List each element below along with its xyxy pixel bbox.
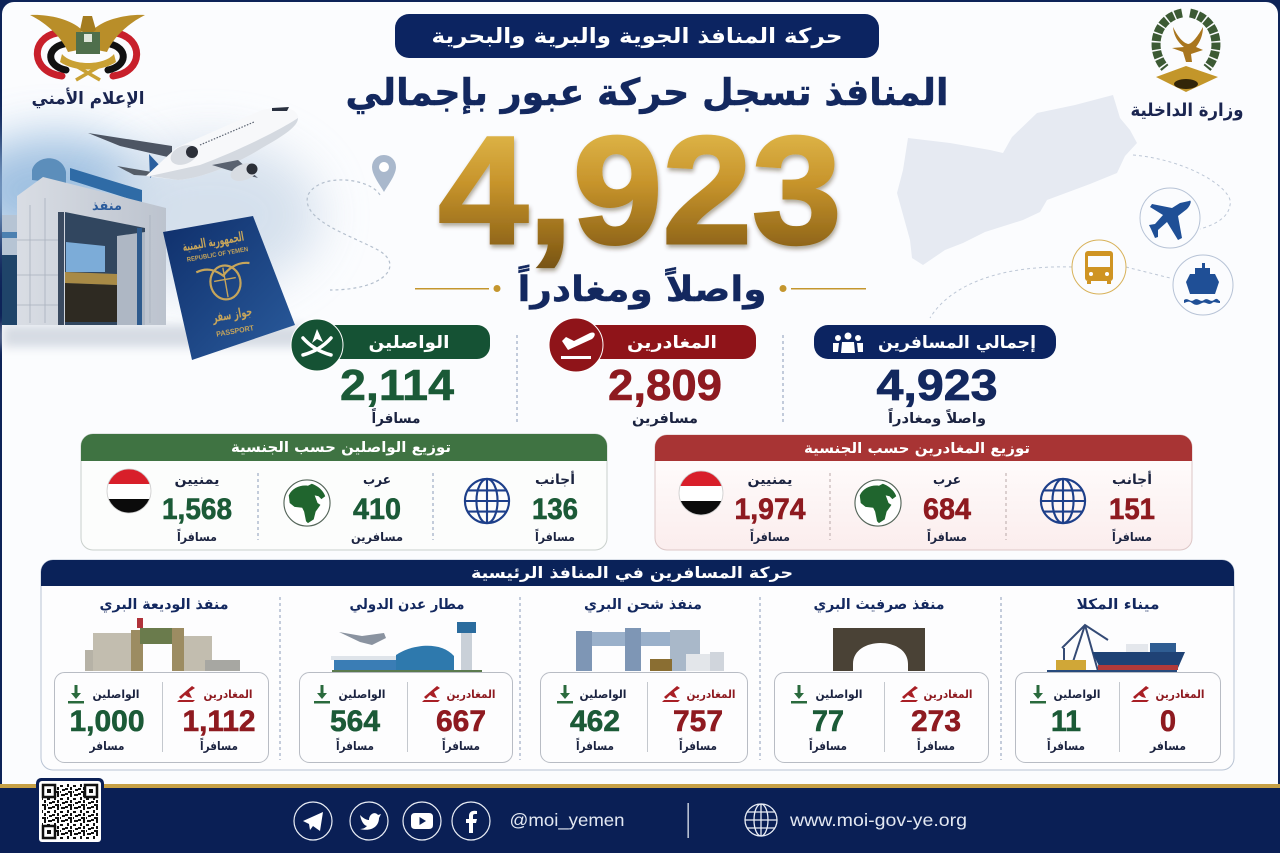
icon: passport emblem bbox=[196, 261, 255, 304]
icon: facebook bbox=[466, 811, 477, 833]
icon: bus circle bbox=[1072, 240, 1126, 294]
card: Mukalla figures bbox=[1016, 672, 1220, 762]
cell: arabs: 684 bbox=[923, 493, 971, 526]
card: Al-Wadiah figures: مسافر bbox=[89, 739, 124, 753]
sign: terminal name: منفذ bbox=[92, 199, 122, 214]
pill: departures: المغادرين bbox=[627, 333, 717, 353]
card: Al-Wadiah figures: الواصلين bbox=[92, 687, 140, 702]
caption: departures: مسافرين bbox=[632, 411, 698, 427]
card: Sarfait figures: مسافراً bbox=[917, 737, 955, 753]
big number: 4,923 bbox=[438, 105, 842, 276]
card: Al-Wadiah figures bbox=[54, 672, 268, 762]
card: Shahn figures: مسافراً bbox=[679, 737, 717, 753]
cell: yemenis bbox=[106, 468, 232, 544]
subtitle: واصلاً ومغادراً bbox=[518, 264, 766, 310]
cell: arabs: عرب bbox=[933, 472, 961, 488]
panel: departures by nationality bbox=[655, 435, 1192, 550]
card: Shahn figures: مسافراً bbox=[576, 737, 614, 753]
port name: منفذ شحن البري bbox=[584, 597, 702, 614]
illustration: Al-Wadiah gate bbox=[85, 618, 240, 671]
card: Shahn figures bbox=[540, 672, 748, 762]
card: Aden figures: 667 bbox=[436, 705, 486, 738]
card: Shahn figures: الواصلين bbox=[580, 687, 626, 702]
port: Al-Wadiah bbox=[54, 597, 268, 762]
illustration: airport, plane and passport bbox=[0, 107, 320, 360]
icon: youtube bbox=[411, 813, 433, 829]
illustration: Mukalla port ship and crane bbox=[1047, 625, 1185, 672]
label: security media: الإعلام الأمني bbox=[32, 88, 144, 109]
card: Aden figures: 564 bbox=[330, 705, 380, 738]
panel heading: توزيع الواصلين حسب الجنسية bbox=[231, 440, 451, 456]
heading pill bbox=[395, 14, 879, 58]
cell: foreigners: مسافراً bbox=[535, 528, 575, 544]
pill: arrivals: الواصلين bbox=[368, 333, 450, 353]
cell: yemenis: مسافراً bbox=[750, 528, 790, 544]
card: Sarfait figures: مسافراً bbox=[809, 737, 847, 753]
panel heading: توزيع المغادرين حسب الجنسية bbox=[804, 441, 1030, 457]
panel: main ports traffic bbox=[41, 560, 1234, 770]
card: Sarfait figures bbox=[774, 672, 988, 762]
text: passport arabic: جواز سفر bbox=[211, 304, 253, 326]
port name: ميناء المكلا bbox=[1076, 597, 1160, 613]
card: Al-Wadiah figures: 1,112 bbox=[182, 705, 256, 738]
cell: foreigners: 136 bbox=[532, 493, 578, 526]
card: Aden figures: المغادرين bbox=[446, 687, 496, 701]
cell: foreigners: أجانب bbox=[1112, 471, 1152, 488]
card: Aden figures: الواصلين bbox=[338, 687, 386, 702]
QR code bbox=[36, 778, 104, 844]
stat: departures bbox=[549, 318, 756, 427]
cell: yemenis bbox=[678, 470, 806, 544]
card: Shahn figures: 757 bbox=[673, 705, 723, 738]
card: Mukalla figures: المغادرين bbox=[1156, 687, 1204, 701]
cell: yemenis: 1,974 bbox=[734, 493, 806, 526]
social icons bbox=[294, 802, 490, 840]
card: Mukalla figures: الواصلين bbox=[1054, 687, 1100, 702]
gold ornaments bbox=[415, 285, 866, 292]
card: Mukalla figures: 11 bbox=[1051, 705, 1081, 738]
footer handle: @moi_yemen bbox=[510, 810, 624, 831]
pill: arrivals bbox=[291, 319, 490, 371]
card: Sarfait figures: 77 bbox=[812, 705, 844, 738]
cell: yemenis: 1,568 bbox=[162, 493, 232, 526]
cell: foreigners: مسافراً bbox=[1112, 528, 1152, 544]
card: Mukalla figures: مسافراً bbox=[1047, 737, 1085, 753]
icon: website globe bbox=[745, 804, 777, 836]
title: المنافذ تسجل حركة عبور بإجمالي bbox=[346, 71, 948, 114]
cell: arabs bbox=[855, 472, 971, 544]
map: Yemen bbox=[897, 95, 1137, 265]
port: Shahn bbox=[540, 597, 748, 762]
cell: yemenis: مسافراً bbox=[177, 528, 217, 544]
text: passport latin: PASSPORT bbox=[216, 323, 255, 339]
pill: departures bbox=[549, 318, 756, 372]
port name: منفذ الوديعة البري bbox=[100, 597, 228, 614]
card: Al-Wadiah figures: المغادرين bbox=[204, 687, 252, 701]
caption: arrivals: مسافراً bbox=[371, 408, 420, 427]
cell: arabs: مسافراً bbox=[927, 528, 967, 544]
caption: total: واصلاً ومغادراً bbox=[888, 408, 986, 427]
port name: منفذ صرفيث البري bbox=[814, 597, 944, 614]
footer band bbox=[0, 784, 1280, 853]
card: Al-Wadiah figures: 1,000 bbox=[70, 705, 144, 738]
emblem: security media logo bbox=[30, 15, 145, 80]
cell: foreigners: أجانب bbox=[535, 471, 575, 488]
value: total: 4,923 bbox=[876, 361, 998, 410]
cell: yemenis: يمنيين bbox=[174, 472, 220, 488]
cell: arabs bbox=[284, 472, 403, 544]
emblem: ministry of interior logo bbox=[1156, 13, 1218, 92]
card: Aden figures: مسافراً bbox=[336, 737, 374, 753]
card: Mukalla figures: 0 bbox=[1160, 705, 1176, 738]
icon: airplane bbox=[88, 107, 298, 184]
icon: ship circle bbox=[1173, 255, 1233, 315]
cell: yemenis: يمنيين bbox=[748, 472, 792, 488]
port: Sarfait bbox=[774, 597, 988, 762]
panel heading: حركة المسافرين في المنافذ الرئيسية bbox=[471, 564, 793, 583]
footer website: www.moi-gov-ye.org bbox=[789, 810, 967, 830]
transport routes bbox=[930, 155, 1230, 318]
card: Shahn figures: 462 bbox=[570, 705, 620, 738]
icon: telegram bbox=[303, 812, 323, 831]
label: ministry of interior: وزارة الداخلية bbox=[1130, 100, 1244, 121]
card: Mukalla figures: مسافر bbox=[1149, 739, 1186, 753]
icon: passport bbox=[163, 216, 295, 360]
illustration: Aden terminal bbox=[331, 622, 482, 672]
icon: location pin and route bbox=[307, 155, 396, 290]
card: Sarfait figures: المغادرين bbox=[924, 687, 972, 701]
stat: arrivals bbox=[291, 319, 490, 427]
cell: arabs: عرب bbox=[363, 472, 391, 488]
port name: مطار عدن الدولي bbox=[350, 597, 464, 613]
value: arrivals: 2,114 bbox=[340, 361, 455, 410]
port: Aden airport bbox=[300, 597, 512, 762]
card: Al-Wadiah figures: مسافراً bbox=[200, 737, 238, 753]
card: Aden figures: مسافراً bbox=[442, 737, 480, 753]
cell: foreigners: 151 bbox=[1109, 493, 1155, 526]
text: republic of yemen: REPUBLIC OF YEMEN bbox=[186, 246, 249, 264]
panel: arrivals by nationality bbox=[81, 434, 607, 550]
card: Aden figures bbox=[300, 672, 512, 762]
building: airport terminal bbox=[2, 158, 166, 325]
stat: total bbox=[814, 325, 1056, 427]
port: Mukalla bbox=[1016, 597, 1220, 762]
card: Sarfait figures: الواصلين bbox=[816, 687, 862, 702]
text: passport republic name: الجمهورية اليمنية bbox=[182, 230, 245, 255]
cell: arabs: 410 bbox=[353, 493, 401, 526]
icon: airplane circle bbox=[1140, 188, 1200, 248]
cell: foreigners bbox=[1041, 471, 1155, 544]
heading pill: حركة المنافذ الجوية والبرية والبحرية bbox=[432, 24, 842, 48]
pill: total: إجمالي المسافرين bbox=[878, 333, 1036, 353]
card: Shahn figures: المغادرين bbox=[686, 687, 736, 701]
pill: total bbox=[814, 325, 1056, 359]
value: departures: 2,809 bbox=[608, 361, 722, 410]
icon: twitter bbox=[360, 813, 381, 830]
illustration: Shahn gate bbox=[576, 628, 724, 671]
illustration: Sarfait arch bbox=[833, 628, 925, 671]
cell: foreigners bbox=[465, 471, 578, 544]
card: Sarfait figures: 273 bbox=[911, 705, 961, 738]
cell: arabs: مسافرين bbox=[351, 530, 403, 544]
